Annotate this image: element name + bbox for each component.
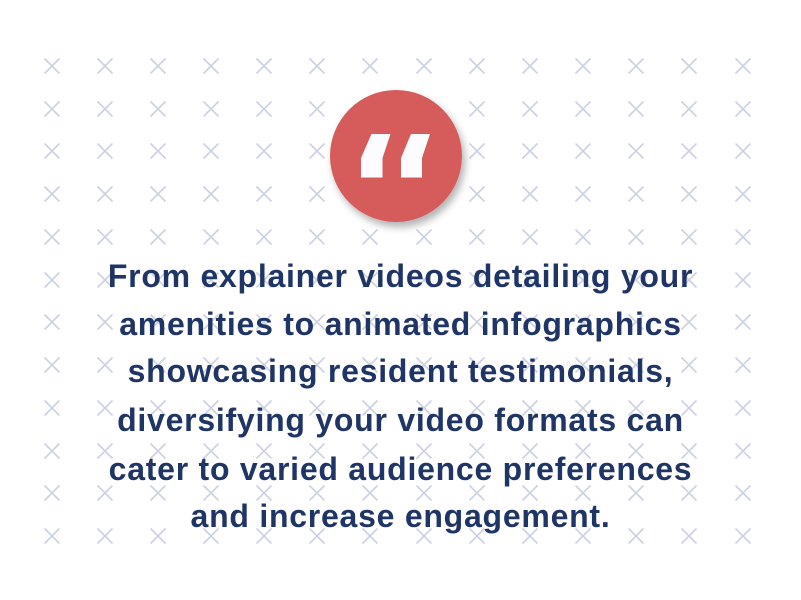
- quote text: showcasing resident testimonials,: [128, 353, 673, 389]
- quote text: amenities to animated infographics: [119, 306, 682, 342]
- quote text: diversifying your video formats can: [117, 402, 684, 438]
- quote text: cater to varied audience preferences: [109, 451, 692, 487]
- quote text: From explainer videos detailing your: [108, 258, 693, 294]
- quote text: and increase engagement.: [191, 498, 610, 534]
